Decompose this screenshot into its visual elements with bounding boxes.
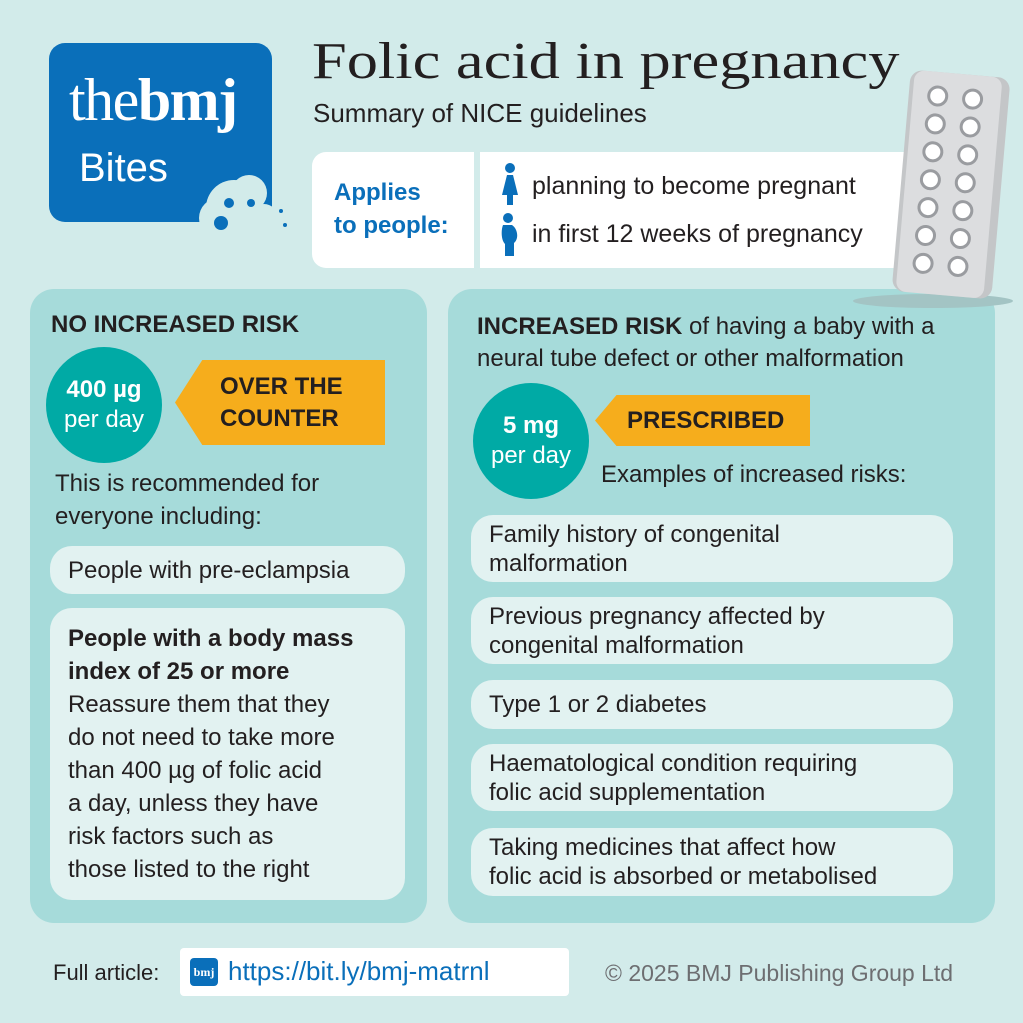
text: planning: planning to become pregnant bbox=[532, 172, 856, 200]
box: family history: Family history of congenital bbox=[489, 520, 780, 548]
risk boxes bbox=[471, 515, 953, 896]
link box bbox=[180, 948, 569, 996]
box: previous pregnancy: Previous pregnancy affected by bbox=[489, 602, 825, 630]
icon: pregnant woman bbox=[502, 213, 518, 256]
subtitle: Summary of NICE guidelines bbox=[313, 98, 647, 128]
panel: increased risk bbox=[448, 289, 995, 923]
box: medicines: folic acid is absorbed or metabolised bbox=[489, 863, 877, 890]
circle: 400 µg per day: 400 µg bbox=[66, 376, 142, 403]
heading bbox=[477, 313, 935, 372]
box: haematological: folic acid supplementation bbox=[489, 778, 765, 806]
label: applies to people: Applies bbox=[334, 179, 421, 206]
box: family history: malformation bbox=[489, 550, 628, 576]
box: BMI 25: than 400 µg of folic acid bbox=[68, 757, 322, 784]
icon: blister pill pack bbox=[853, 70, 1013, 308]
box: BMI 25: People with a body mass bbox=[68, 625, 353, 652]
box: BMI 25: Reassure them that they bbox=[68, 691, 329, 718]
circle: 400 µg per day: per day bbox=[64, 406, 144, 433]
text: first 12 weeks: in first 12 weeks of pregnancy bbox=[532, 220, 863, 248]
box: family history bbox=[471, 515, 953, 582]
heading: neural tube defect or other malformation bbox=[477, 345, 904, 372]
heading: INCREASED RISK of having a baby with a bbox=[477, 313, 935, 340]
circle: 5 mg per day: 5 mg bbox=[503, 412, 559, 439]
box: BMI 25: do not need to take more bbox=[68, 724, 335, 751]
box: haematological: Haematological condition requiring bbox=[489, 750, 857, 776]
text: recommended for everyone: everyone including: bbox=[55, 503, 262, 530]
text: examples: Examples of increased risks: bbox=[601, 461, 906, 488]
box: pre-eclampsia: People with pre-eclampsia bbox=[68, 556, 349, 584]
logo: thebmj Bites: Bites bbox=[79, 146, 168, 190]
arrow: over the counter bbox=[175, 360, 385, 445]
icon: woman bbox=[502, 163, 518, 205]
box: pre-eclampsia bbox=[50, 546, 405, 594]
circle: 400 µg per day bbox=[46, 347, 162, 463]
applies-to box bbox=[312, 152, 995, 268]
heading: NO INCREASED RISK bbox=[51, 311, 299, 338]
circle: 5 mg per day bbox=[473, 383, 589, 499]
box: medicines: Taking medicines that affect how bbox=[489, 834, 835, 861]
logo: thebmj Bites: thebmj bbox=[69, 67, 237, 133]
footer: full article: Full article: bbox=[53, 960, 159, 985]
url: https://bit.ly/bmj-matrnl bbox=[228, 956, 490, 986]
label: applies to people: to people: bbox=[334, 212, 449, 239]
text: recommended for everyone: This is recommended for bbox=[55, 470, 319, 497]
box: BMI 25: risk factors such as bbox=[68, 823, 273, 850]
arrow: prescribed: PRESCRIBED bbox=[627, 406, 784, 434]
box: BMI 25 bbox=[50, 608, 405, 900]
text: recommended for everyone bbox=[55, 470, 319, 530]
box: haematological bbox=[471, 744, 953, 811]
box: previous pregnancy: congenital malformation bbox=[489, 632, 744, 658]
box: diabetes: Type 1 or 2 diabetes bbox=[489, 691, 706, 718]
circle: 5 mg per day: per day bbox=[491, 442, 571, 469]
box: previous pregnancy bbox=[471, 597, 953, 664]
icon: bmj bbox=[190, 958, 218, 986]
arrow: over the counter: COUNTER bbox=[220, 404, 339, 432]
box: BMI 25: those listed to the right bbox=[68, 856, 309, 883]
arrow: prescribed bbox=[595, 395, 810, 446]
arrow: over the counter: OVER THE bbox=[220, 372, 343, 400]
box: BMI 25: a day, unless they have bbox=[68, 790, 318, 817]
box: diabetes bbox=[471, 680, 953, 729]
copyright: © 2025 BMJ Publishing Group Ltd bbox=[605, 960, 953, 986]
label: applies to people bbox=[334, 179, 449, 239]
box: medicines bbox=[471, 828, 953, 896]
title: Folic acid in pregnancy bbox=[312, 33, 899, 90]
box: BMI 25: index of 25 or more bbox=[68, 658, 289, 685]
panel: no increased risk bbox=[30, 289, 427, 923]
icon: bmj: bmj bbox=[194, 965, 214, 979]
logo: thebmj Bites bbox=[49, 43, 272, 222]
